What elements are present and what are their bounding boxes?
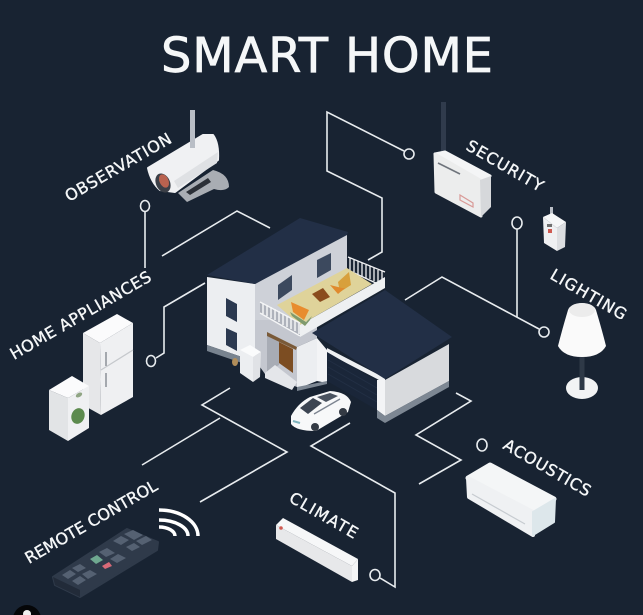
icon: fridge and washing machine [49, 314, 133, 441]
house: door [279, 342, 293, 373]
garage: corner post [377, 379, 385, 416]
house: balcony furniture [290, 272, 351, 326]
house: left wall [207, 277, 255, 360]
house: plinth [207, 345, 242, 363]
house: left windows [226, 298, 237, 351]
house: lower recessed wall [255, 320, 317, 387]
label: security: SECURITY [463, 136, 547, 196]
house: upper windows [278, 253, 331, 300]
badge: bottom-left corner mark [13, 605, 41, 615]
label: remote control: REMOTE CONTROL [22, 476, 161, 567]
house: main roof [207, 218, 348, 284]
icon: car [291, 391, 351, 431]
garage: plinth [377, 381, 449, 423]
icon: climate panel [276, 518, 358, 582]
icon: router [435, 102, 491, 217]
house: entry walls [267, 335, 327, 391]
icon: table lamp [558, 303, 606, 399]
label: observation: OBSERVATION [62, 129, 175, 205]
label: acoustics: ACOUSTICS [500, 435, 594, 500]
label: home appliances: HOME APPLIANCES [7, 267, 155, 363]
icon: house [207, 218, 452, 423]
label: lighting: LIGHTING [547, 265, 630, 324]
house: utility box [232, 345, 261, 382]
house: balcony slab [300, 277, 385, 337]
garage: roof [312, 290, 452, 379]
icon: wireless signal [159, 510, 198, 536]
icon: remote control [53, 529, 158, 597]
title: SMART HOME [161, 28, 493, 84]
icon: sensor [543, 207, 566, 251]
house: steps [265, 365, 297, 390]
house: upper front wall [255, 233, 347, 345]
house: balcony floor [277, 268, 372, 325]
house: balcony back railing [348, 257, 385, 284]
icon: acoustics unit [468, 465, 555, 535]
garage: side wall [385, 344, 449, 416]
garage: door [327, 352, 377, 410]
house: balcony front railing [260, 302, 300, 337]
garage: trim [327, 348, 385, 383]
house: lintel [267, 332, 297, 350]
connector lines [140, 112, 549, 587]
icon: security camera [148, 110, 229, 202]
label: climate: CLIMATE [286, 488, 361, 542]
